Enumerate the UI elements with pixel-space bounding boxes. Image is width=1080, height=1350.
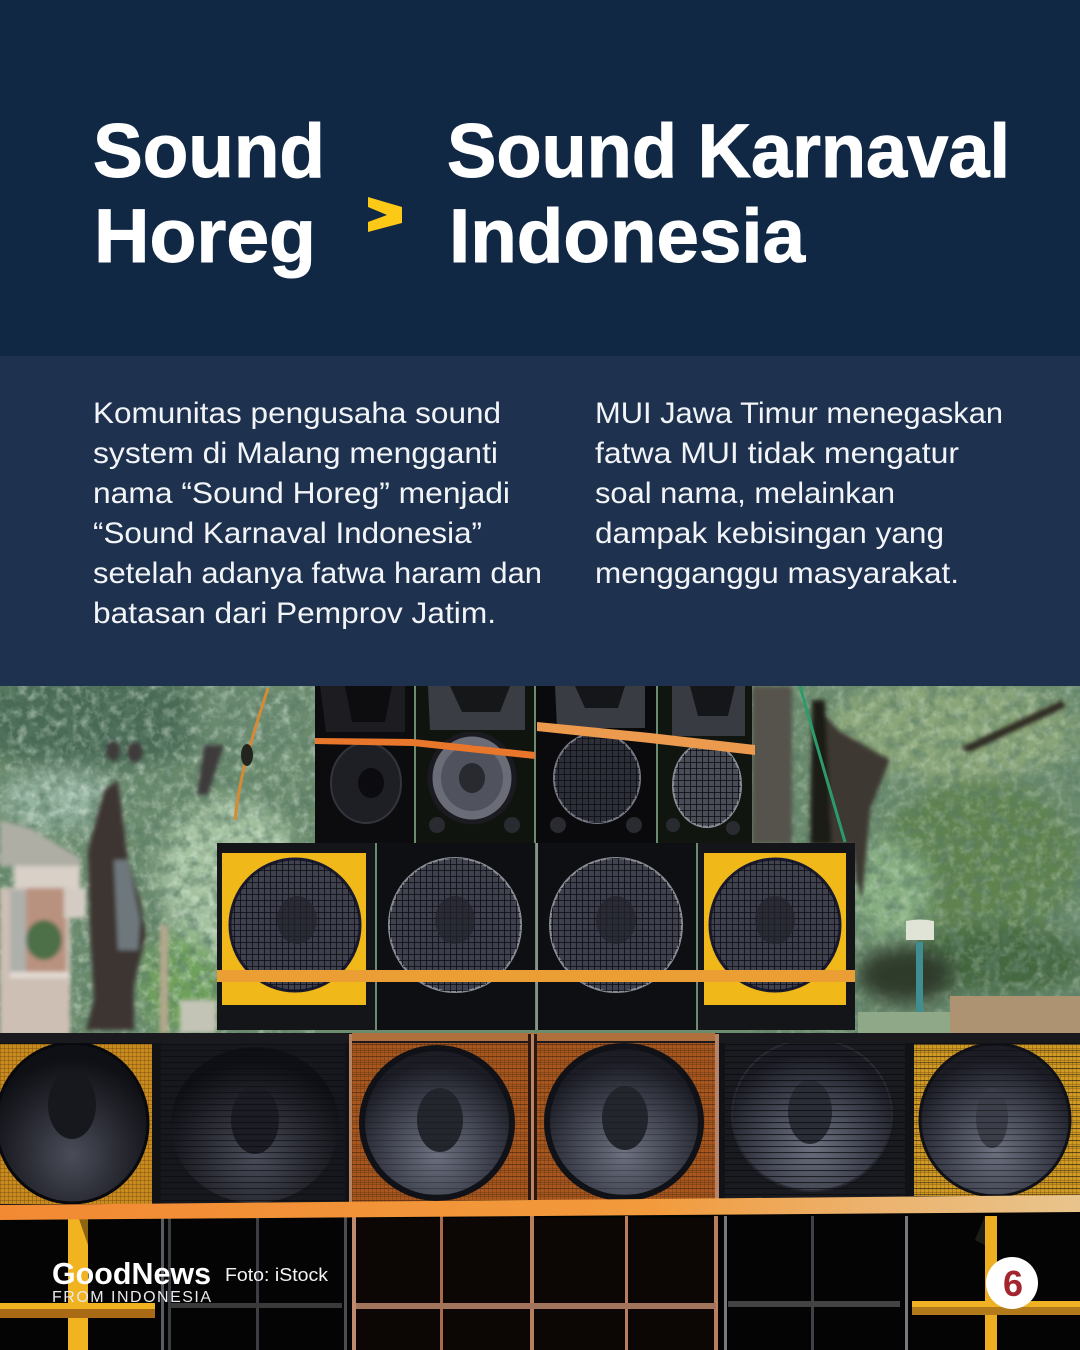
photo background: tree trunks and branches [86,686,1066,1033]
title: new name [447,109,1010,279]
text block: left column: Komunitas pengusaha sound [93,397,501,430]
panel: title background [0,0,1080,356]
text block: right column: MUI Jawa Timur menegaskan [595,397,1003,430]
text block: right column: dampak kebisingan yang [595,517,944,550]
title: new name: Sound Karnaval [447,109,1010,194]
text block: left column: system di Malang mengganti [93,437,498,470]
orange straps on top speakers [315,722,755,759]
text block: right column: soal nama, melainkan [595,477,895,510]
logo: GoodNews from Indonesia [52,1256,211,1306]
icon: yellow chevron arrow [368,197,402,232]
text block: left column: “Sound Karnaval Indonesia” [93,517,482,550]
page number badge: 6 [1003,1263,1023,1304]
orange horizontal strap [0,1195,1080,1220]
title: new name: Indonesia [449,194,806,279]
photo credit: Foto: iStock [225,1265,329,1285]
hanging orange and green strings [235,686,845,842]
title: old name [93,109,325,279]
panel: body text background [0,356,1080,686]
photo background: trees and foliage [0,670,1080,1046]
text block: left column: batasan dari Pemprov Jatim. [93,597,496,630]
text block: right column [595,397,1003,590]
photo background: lamp post and fence [858,920,1080,1033]
page number badge [986,1257,1038,1309]
photo: stacked sound system speakers outdoors [0,670,1080,1350]
text block: left column: setelah adanya fatwa haram dan [93,557,542,590]
speaker row: top four cabinets [315,686,752,843]
speaker row: bottom six cabinets [0,1033,1080,1208]
speaker row: middle four cabinets [217,843,855,1030]
logo: GoodNews from Indonesia: GoodNews [52,1256,211,1291]
text block: left column [93,397,542,630]
title: old name: Sound [93,109,325,194]
text block: right column: fatwa MUI tidak mengatur [595,437,959,470]
text block: right column: mengganggu masyarakat. [595,557,959,590]
lower speaker compartments [0,1212,1080,1350]
orange strap on middle speakers [217,970,855,982]
text block: left column: nama “Sound Horeg” menjadi [93,477,510,510]
title: old name: Horeg [94,194,316,279]
logo: GoodNews from Indonesia: FROM INDONESIA [52,1289,211,1306]
photo background: building at left [0,820,86,1036]
